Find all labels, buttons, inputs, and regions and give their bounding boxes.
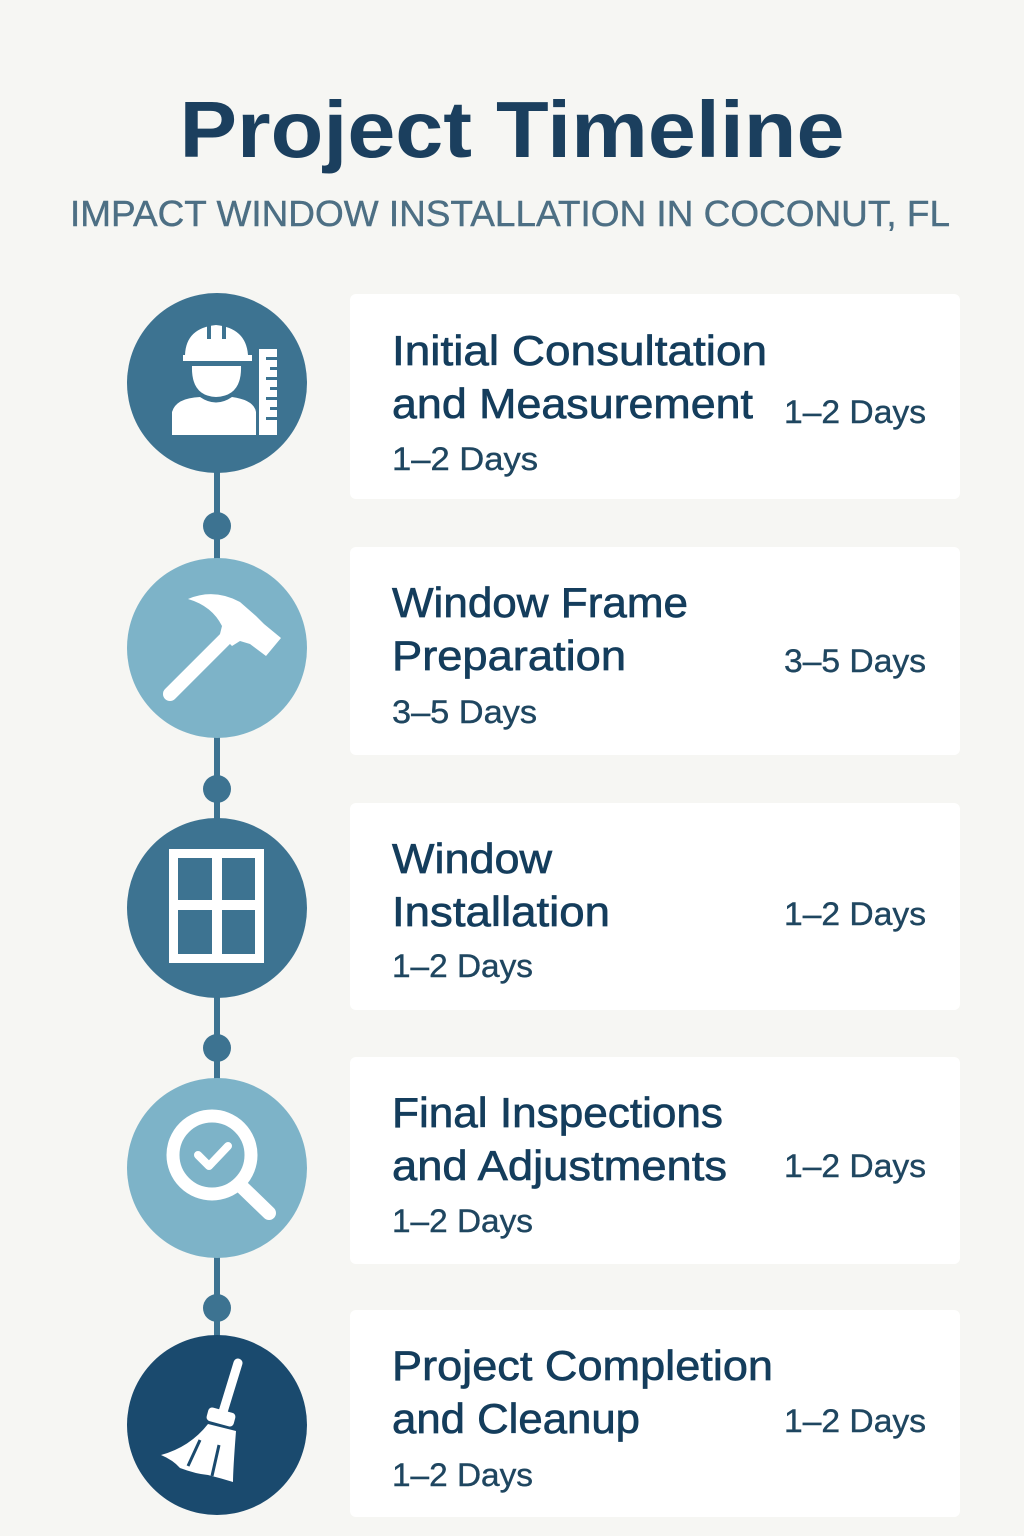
icon: window (127, 818, 307, 998)
panel: step 5 card: Project Completion (392, 1342, 773, 1389)
panel: step 2 card (350, 547, 960, 755)
panel: step 3 card: 1–2 Days (784, 896, 926, 932)
panel: step 5 card (350, 1310, 960, 1517)
title: Project Timeline (180, 85, 844, 174)
panel: step 1 card: 1–2 Days (392, 441, 538, 477)
panel: step 5 card: 1–2 Days (392, 1457, 533, 1493)
panel: step 1 card: 1–2 Days (784, 394, 926, 430)
panel: step 2 card: Window Frame (392, 579, 688, 626)
panel: step 5 card: and Cleanup (392, 1395, 640, 1442)
panel: step 4 card: Final Inspections (392, 1089, 723, 1136)
panel: step 1 card: Initial Consultation (392, 327, 767, 374)
icon: hammer (0, 0, 307, 738)
panel: step 1 card: and Measurement (392, 380, 753, 427)
icon: magnifier with check (127, 1078, 307, 1258)
panel: step 4 card: and Adjustments (392, 1142, 727, 1189)
panel: step 5 card: 1–2 Days (784, 1403, 926, 1439)
panel: step 2 card: 3–5 Days (784, 643, 926, 679)
panel: step 3 card (350, 803, 960, 1010)
panel: step 3 card: Window (392, 835, 553, 882)
panel: step 4 card (350, 1057, 960, 1264)
timeline connector line (203, 470, 231, 1340)
panel: step 3 card: 1–2 Days (392, 948, 533, 984)
panel: step 2 card: 3–5 Days (392, 694, 537, 730)
panel: step 4 card: 1–2 Days (784, 1148, 926, 1184)
icon: broom (127, 1335, 307, 1515)
panel: step 1 card (350, 294, 960, 499)
subtitle: IMPACT WINDOW INSTALLATION IN COCONUT, FL (70, 193, 950, 234)
panel: step 4 card: 1–2 Days (392, 1203, 533, 1239)
icon: worker with ruler (127, 293, 307, 473)
panel: step 2 card: Preparation (392, 632, 626, 679)
panel: step 3 card: Installation (392, 888, 610, 935)
